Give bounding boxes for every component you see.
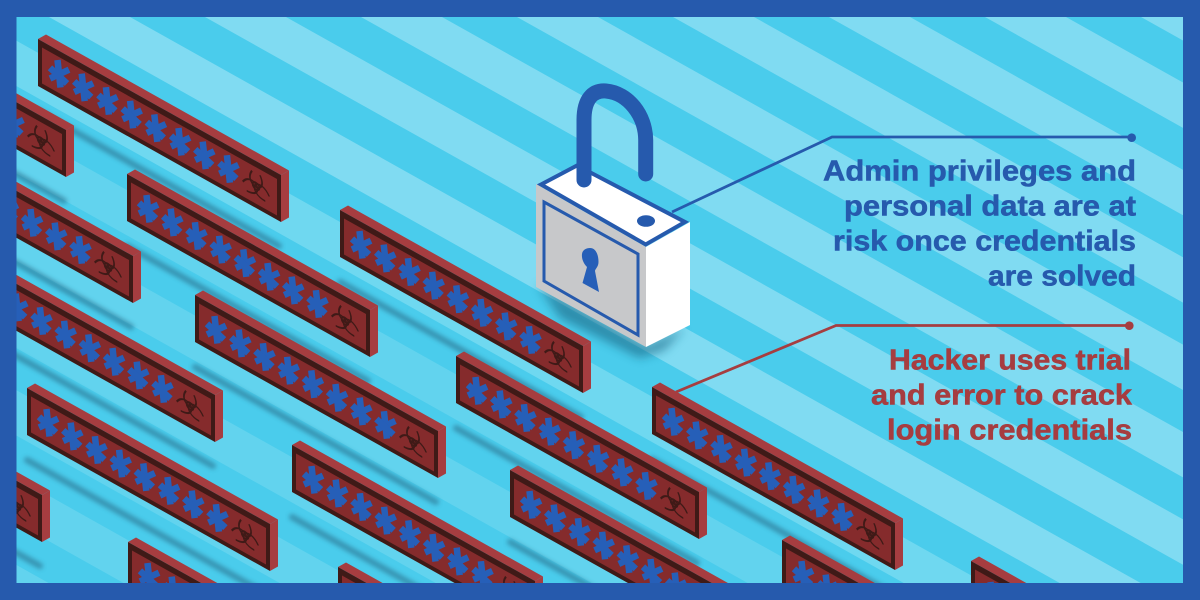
callout text: hacker: and error to crack (871, 379, 1133, 411)
password bar 8 (27, 384, 278, 571)
bar shadows (0, 66, 893, 600)
password bar 17 (971, 556, 1200, 600)
leader line: blue (672, 137, 1131, 212)
shackle hole (637, 215, 655, 227)
password bar 4 (0, 116, 141, 303)
keyhole (582, 248, 599, 292)
password bar 15 (338, 562, 589, 600)
callout text: admin privileges: Admin privileges and (823, 156, 1136, 188)
padlock top face (541, 166, 685, 244)
leader dot: red (1125, 321, 1134, 330)
password bar 13 (0, 354, 50, 542)
password bar 9 (456, 352, 707, 539)
password bar 6 (195, 290, 446, 478)
callout text: admin privileges (823, 156, 1136, 293)
callout text: hacker: login credentials (887, 414, 1132, 446)
callout text: hacker (871, 344, 1133, 446)
password bar 11 (292, 440, 543, 600)
leader line: red (676, 326, 1129, 392)
padlock side face (646, 222, 690, 347)
password bar 3 (127, 170, 378, 357)
callout text: hacker: Hacker uses trial (889, 344, 1131, 376)
leader dot: blue (1127, 133, 1136, 142)
padlock front panel outline (544, 202, 638, 335)
shackle (584, 91, 646, 180)
callout text: admin privileges: personal data are at (844, 191, 1136, 223)
password bar 5 (340, 206, 591, 393)
password bar 12 (510, 466, 761, 600)
callout text: admin privileges: are solved (988, 261, 1136, 293)
password bar 14 (128, 538, 379, 600)
password bar 16 (782, 536, 1033, 600)
password bar 1 (38, 34, 289, 222)
password bar 10 (652, 382, 903, 570)
password bar 7 (0, 254, 223, 442)
lock shadow (537, 284, 685, 358)
icon: open padlock (536, 91, 690, 347)
callout text: admin privileges: risk once credentials (833, 226, 1136, 258)
padlock front face (536, 184, 646, 347)
password bar 2 (0, 0, 74, 177)
